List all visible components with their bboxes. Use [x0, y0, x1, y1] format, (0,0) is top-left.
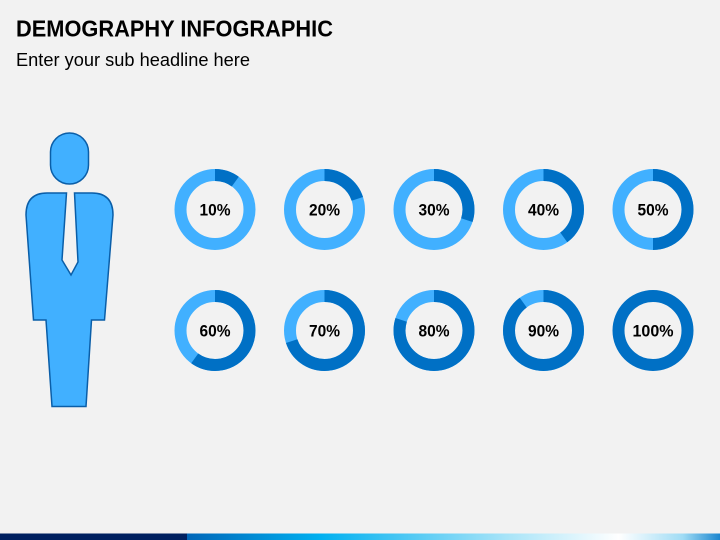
donut: 70%	[290, 296, 359, 365]
donut: 80%	[400, 296, 468, 365]
donut: 20%: 20%	[309, 202, 340, 220]
donut: 80%: 80%	[418, 322, 450, 340]
donut: 20%	[290, 175, 359, 244]
donut: 90%	[509, 296, 578, 365]
donut: 60%	[180, 296, 250, 365]
footer bar	[0, 534, 720, 540]
donut: 100%: 100%	[632, 322, 674, 340]
donut: 50%: 50%	[638, 202, 669, 220]
person head	[50, 133, 88, 184]
donut: 90%: 90%	[528, 322, 559, 340]
sub headline: Enter your sub headline here	[16, 50, 250, 70]
donut: 30%	[400, 175, 468, 244]
donut: 50%	[618, 175, 688, 244]
donut: 100%	[618, 296, 688, 365]
icon: business person	[26, 133, 113, 406]
title: DEMOGRAPHY INFOGRAPHIC	[16, 16, 333, 42]
person body with tie	[26, 193, 113, 406]
donut: 10%: 10%	[200, 202, 231, 220]
donut: 10%	[180, 175, 250, 244]
donut: 30%: 30%	[418, 202, 450, 220]
donut: 40%	[509, 175, 578, 244]
donut: 60%: 60%	[200, 322, 231, 340]
donut: 70%: 70%	[309, 322, 340, 340]
donut: 40%: 40%	[528, 202, 559, 220]
